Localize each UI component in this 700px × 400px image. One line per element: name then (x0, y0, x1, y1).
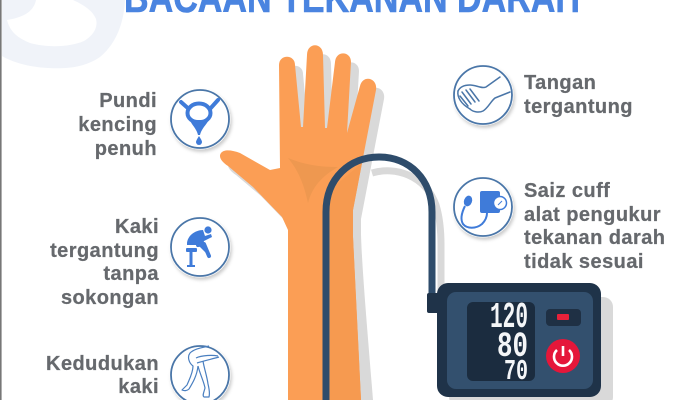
label: Kaki tergantung tanpa sokongan: tergantung (50, 240, 159, 262)
hand and forearm (220, 45, 384, 400)
icon: sitting figure (170, 216, 230, 278)
label: Tangan tergantung: tergantung (524, 96, 633, 118)
forearm shading (330, 163, 362, 400)
decorative background emblem (2, 0, 125, 68)
label: Saiz cuff alat pengukur tekanan darah tidak sesuai: tidak sesuai (524, 251, 644, 273)
icon: cuff and gauge (452, 176, 514, 238)
screen (467, 302, 535, 381)
reading: 70: 70 (504, 355, 528, 388)
blood pressure monitor (427, 283, 613, 400)
label: Kaki tergantung tanpa sokongan: sokongan (61, 287, 159, 309)
icon: full bladder (170, 88, 230, 150)
label: Saiz cuff alat pengukur tekanan darah tidak sesuai: tekanan darah (524, 227, 665, 249)
power button (546, 339, 580, 373)
label: Kedudukan kaki: kaki (118, 376, 159, 398)
label: Saiz cuff alat pengukur tekanan darah tidak sesuai: Saiz cuff (524, 180, 610, 202)
label: Pundi kencing penuh: kencing (78, 114, 157, 136)
label: Pundi kencing penuh: Pundi (99, 90, 157, 112)
icon: crossed legs (170, 344, 230, 400)
label: Pundi kencing penuh: penuh (95, 138, 157, 160)
reading: 120: 120 (490, 297, 528, 338)
reading: 80: 80 (497, 327, 528, 367)
indicator light (546, 309, 581, 326)
icon: hanging hand (452, 64, 514, 126)
hand (220, 45, 376, 400)
label: Kedudukan kaki: Kedudukan (46, 353, 159, 375)
palm crease (288, 158, 338, 203)
label: Kaki tergantung tanpa sokongan: Kaki (115, 216, 159, 238)
label: Saiz cuff alat pengukur tekanan darah tidak sesuai: alat pengukur (524, 204, 661, 226)
label: Kaki tergantung tanpa sokongan: tanpa (103, 263, 159, 285)
label: Tangan tergantung: Tangan (524, 72, 596, 94)
hand shadow (228, 54, 384, 400)
cuff tube (326, 157, 441, 400)
